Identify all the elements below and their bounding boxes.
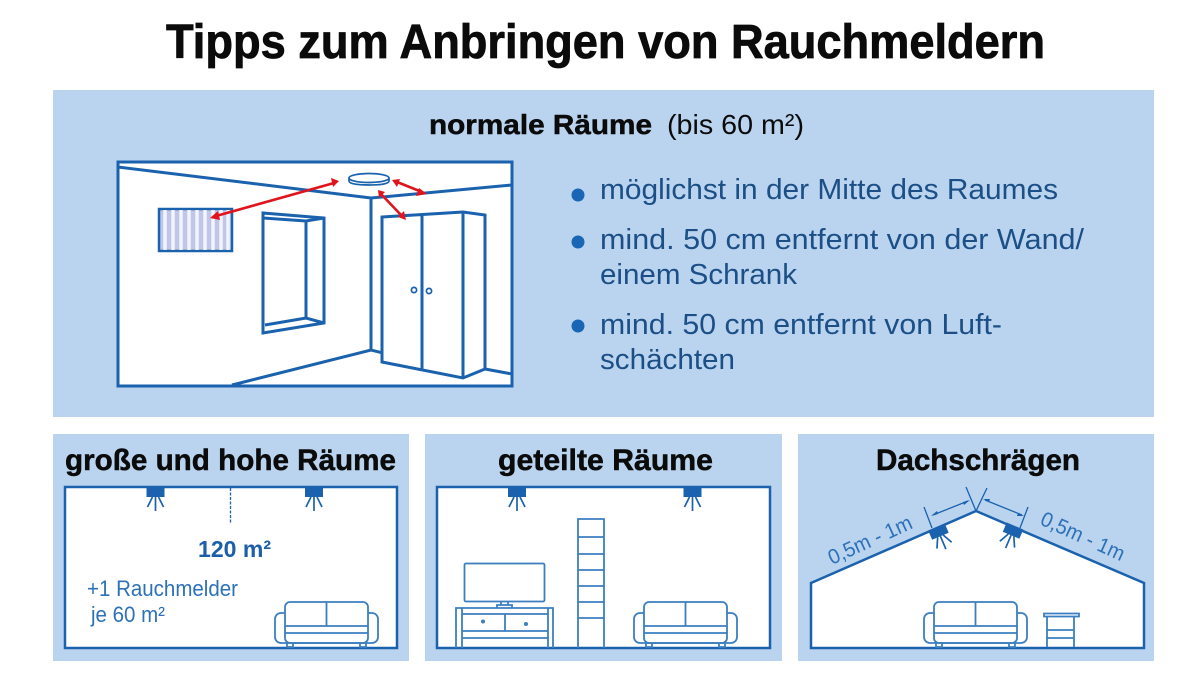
bullet list <box>572 174 1085 376</box>
panel: große und hohe Räume <box>53 434 409 661</box>
icon: sofa <box>634 602 737 647</box>
note <box>87 576 238 627</box>
cabinet knobs <box>481 620 528 626</box>
panel: Dachschrägen <box>798 434 1154 661</box>
note: je 60 m² <box>90 602 165 627</box>
dashed divider <box>230 488 232 524</box>
room outline <box>65 487 397 648</box>
measure ticks <box>924 487 1028 528</box>
icon: air vent <box>159 209 232 251</box>
tv <box>464 564 544 608</box>
heading: große und hohe Räume <box>65 444 396 477</box>
heading: normale Räume: (bis 60 m²) <box>667 109 804 140</box>
sideboard <box>456 608 553 648</box>
bullet 2 <box>572 224 1085 291</box>
icon: detector right <box>305 487 323 511</box>
bullet 3: mind. 50 cm entfernt von Luft- <box>600 309 1002 341</box>
bullet 2: mind. 50 cm entfernt von der Wand/ <box>600 224 1085 256</box>
bookcase <box>578 519 604 648</box>
measure arrow left <box>931 500 970 516</box>
icon: detector left <box>508 487 526 511</box>
bullet 3 <box>572 309 1002 376</box>
heading: normale Räume <box>429 109 804 140</box>
heading: geteilte Räume <box>498 444 713 477</box>
arrows: distances <box>210 178 427 220</box>
icon: detector left <box>146 487 164 511</box>
label: 120 m²: 120 m² <box>198 536 271 562</box>
icon: detector right <box>684 487 702 511</box>
panel: normale Räume <box>53 90 1154 417</box>
panel: geteilte Räume <box>425 434 782 661</box>
icon: sofa <box>275 602 378 647</box>
icon: detector left <box>928 523 954 553</box>
window <box>263 213 324 333</box>
room outline <box>437 487 770 648</box>
room illustration <box>118 162 512 386</box>
icon: smoke detector <box>349 174 389 185</box>
heading: normale Räume: normale Räume <box>429 109 652 140</box>
bullet 3: schächten <box>600 344 735 376</box>
icon: detector right <box>997 522 1023 552</box>
note: +1 Rauchmelder <box>87 576 238 601</box>
label left: 0,5m - 1m <box>825 511 916 570</box>
label right: 0,5m - 1m <box>1037 508 1128 566</box>
measure arrow right <box>983 499 1024 516</box>
title: Tipps zum Anbringen von Rauchmeldern <box>166 16 1045 69</box>
attic outline <box>811 511 1144 648</box>
bullet 2: einem Schrank <box>600 259 797 291</box>
icon: sofa <box>924 602 1027 647</box>
bullet 1: möglichst in der Mitte des Raumes <box>600 174 1058 206</box>
side table <box>1044 614 1079 647</box>
heading: Dachschrägen <box>876 444 1080 477</box>
wardrobe <box>382 212 485 378</box>
